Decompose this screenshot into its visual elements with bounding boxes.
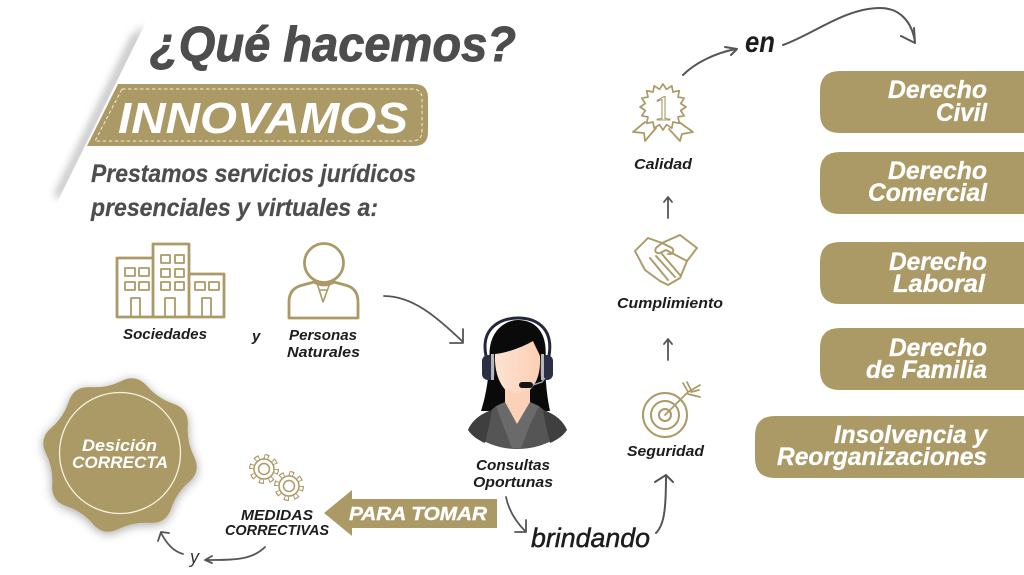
arrow: cumplimiento to calidad [664, 197, 672, 218]
service: derecho comercial: Derecho [888, 157, 987, 185]
arrow: y to decision [158, 532, 183, 554]
icon: medal [633, 84, 693, 141]
service: derecho laboral: Laboral [893, 270, 986, 298]
intro text: Prestamos servicios jurídicos [91, 160, 416, 188]
intro text: presenciales y virtuales a: [90, 194, 378, 222]
service: derecho de familia [820, 328, 1024, 390]
label: consultas oportunas [473, 457, 553, 491]
diagonal shadow band [51, 10, 300, 215]
service: derecho laboral [820, 242, 1024, 304]
icon: buildings [117, 244, 224, 317]
arrow: en to services [783, 8, 915, 45]
service: derecho civil [820, 71, 1024, 133]
service: insolvencia y reorganizaciones: Insolvencia y [834, 421, 988, 449]
arrow: to consultas [384, 296, 463, 343]
arrow: calidad to en [683, 47, 737, 75]
icon: operator woman [468, 318, 567, 449]
service: insolvencia y reorganizaciones: Reorganizaciones [777, 443, 987, 471]
icon: medal: 1 [654, 88, 672, 128]
service: derecho de familia: Derecho [889, 334, 987, 362]
badge: innovamos [87, 84, 428, 146]
label: medidas correctivas: MEDIDAS [241, 507, 313, 524]
title: ¿Qué hacemos? [150, 18, 516, 72]
service: derecho civil: Civil [936, 99, 988, 127]
word: brindando: brindando [531, 523, 650, 553]
service: derecho civil: Derecho [888, 76, 987, 104]
seal: decision correcta: CORRECTA [72, 453, 168, 472]
label: personas naturales: Naturales [287, 344, 360, 361]
icon: target [643, 382, 700, 437]
arrow: medidas to y [205, 547, 265, 563]
label: calidad: Calidad [634, 156, 693, 173]
icon: person [289, 244, 358, 318]
label: sociedades: Sociedades [123, 326, 207, 343]
label: consultas oportunas: Consultas [476, 457, 550, 474]
label: personas naturales [287, 327, 360, 361]
label: cumplimiento: Cumplimiento [617, 295, 723, 312]
arrow: to seguridad [655, 475, 673, 533]
seal: decision correcta [43, 378, 197, 532]
label: y connector: y [188, 547, 200, 567]
service: derecho comercial: Comercial [868, 179, 988, 207]
intro text [90, 160, 416, 222]
service: derecho comercial [820, 152, 1024, 214]
service: derecho laboral: Derecho [889, 248, 987, 276]
word: en: en [745, 26, 775, 59]
label: y: y [251, 328, 261, 345]
badge: innovamos: INNOVAMOS [118, 94, 408, 143]
label: consultas oportunas: Oportunas [473, 474, 553, 491]
service: derecho de familia: de Familia [866, 356, 987, 384]
label: seguridad: Seguridad [627, 443, 705, 460]
label: medidas correctivas: CORRECTIVAS [225, 522, 329, 539]
label: medidas correctivas [225, 507, 329, 539]
label: personas naturales: Personas [289, 327, 357, 344]
arrow banner: para tomar [324, 490, 497, 536]
arrow: to brindando [506, 497, 526, 532]
arrow banner: para tomar: PARA TOMAR [349, 503, 488, 524]
service: insolvencia y reorganizaciones [755, 416, 1024, 478]
arrow: seguridad to cumplimiento [664, 339, 672, 360]
seal: decision correcta: Desición [82, 436, 157, 455]
icon: gears [252, 456, 302, 498]
icon: handshake [635, 235, 697, 285]
